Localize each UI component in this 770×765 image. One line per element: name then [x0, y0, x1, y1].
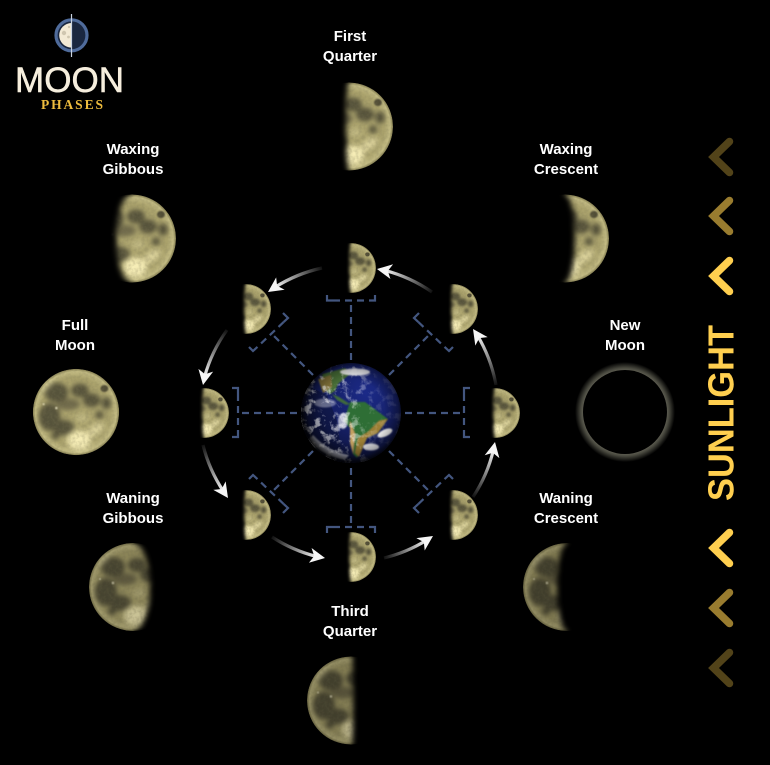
small moon: right — [490, 388, 520, 438]
moon: Waxing Crescent — [562, 194, 609, 282]
label: Third Quarter: Quarter — [323, 623, 377, 640]
label: First Quarter: First — [334, 28, 366, 45]
moon: Waxing Gibbous — [112, 194, 176, 282]
icon: chevron 5 — [714, 592, 730, 624]
icon: chevron 2 — [714, 200, 730, 232]
small moon: upper right — [448, 284, 478, 334]
label: New Moon: New — [610, 317, 640, 334]
label: Waxing Crescent: Crescent — [534, 161, 598, 178]
moon: First Quarter — [342, 82, 393, 170]
arrow 2 — [196, 330, 227, 386]
arrow 4 — [272, 537, 326, 565]
small moon: bottom — [346, 532, 376, 582]
moon: Full Moon — [33, 369, 119, 455]
label: Waxing Crescent: Waxing — [540, 141, 592, 158]
label: Waxing Gibbous: Gibbous — [103, 161, 163, 178]
orbit arrows — [196, 262, 502, 565]
label: Third Quarter: Third — [331, 603, 369, 620]
icon: chevron 3 — [714, 260, 730, 292]
small moon: left — [200, 388, 229, 438]
label: Waning Crescent: Waning — [539, 490, 593, 507]
dashed sight lines and brackets — [232, 295, 470, 533]
moon: New Moon — [575, 362, 675, 462]
orbit moons (small) — [179, 243, 520, 582]
icon: chevron 1 — [714, 142, 730, 172]
small moon: top — [346, 243, 376, 293]
label: Waning Gibbous: Waning — [106, 490, 160, 507]
small moon: lower left — [242, 490, 271, 540]
arrow 5 — [384, 530, 437, 558]
logo subtitle: PHASES: PHASES — [41, 97, 103, 112]
small moon: lower right — [448, 490, 478, 540]
arrow 1 — [264, 268, 322, 298]
arrow 6 — [473, 441, 502, 497]
logo: Moon Phases — [15, 14, 124, 112]
moon: Waning Gibbous — [89, 543, 154, 631]
moon: Third Quarter — [307, 656, 358, 744]
arrow 7 — [467, 325, 496, 385]
label: Waning Gibbous: Gibbous — [103, 510, 163, 527]
icon: chevron 4 — [714, 532, 730, 564]
moon: Waning Crescent — [523, 543, 570, 631]
icon: chevron 6 — [714, 652, 730, 684]
label: New Moon: Moon — [605, 337, 645, 354]
sunlight text: SUNLIGHT — [700, 325, 742, 501]
logo title: MOON: MOON — [15, 61, 124, 100]
label: Full Moon: Moon — [55, 337, 95, 354]
label: Waxing Gibbous: Waxing — [107, 141, 159, 158]
label: Full Moon: Full — [62, 317, 88, 334]
small moon: upper left — [242, 284, 271, 334]
label: First Quarter: Quarter — [323, 48, 377, 65]
arrow 3 — [203, 445, 234, 502]
sunlight indicator — [700, 142, 742, 684]
earth — [301, 363, 401, 463]
arrow 8 — [376, 262, 432, 292]
label: Waning Crescent: Crescent — [534, 510, 598, 527]
icon: logo moon — [56, 14, 87, 57]
